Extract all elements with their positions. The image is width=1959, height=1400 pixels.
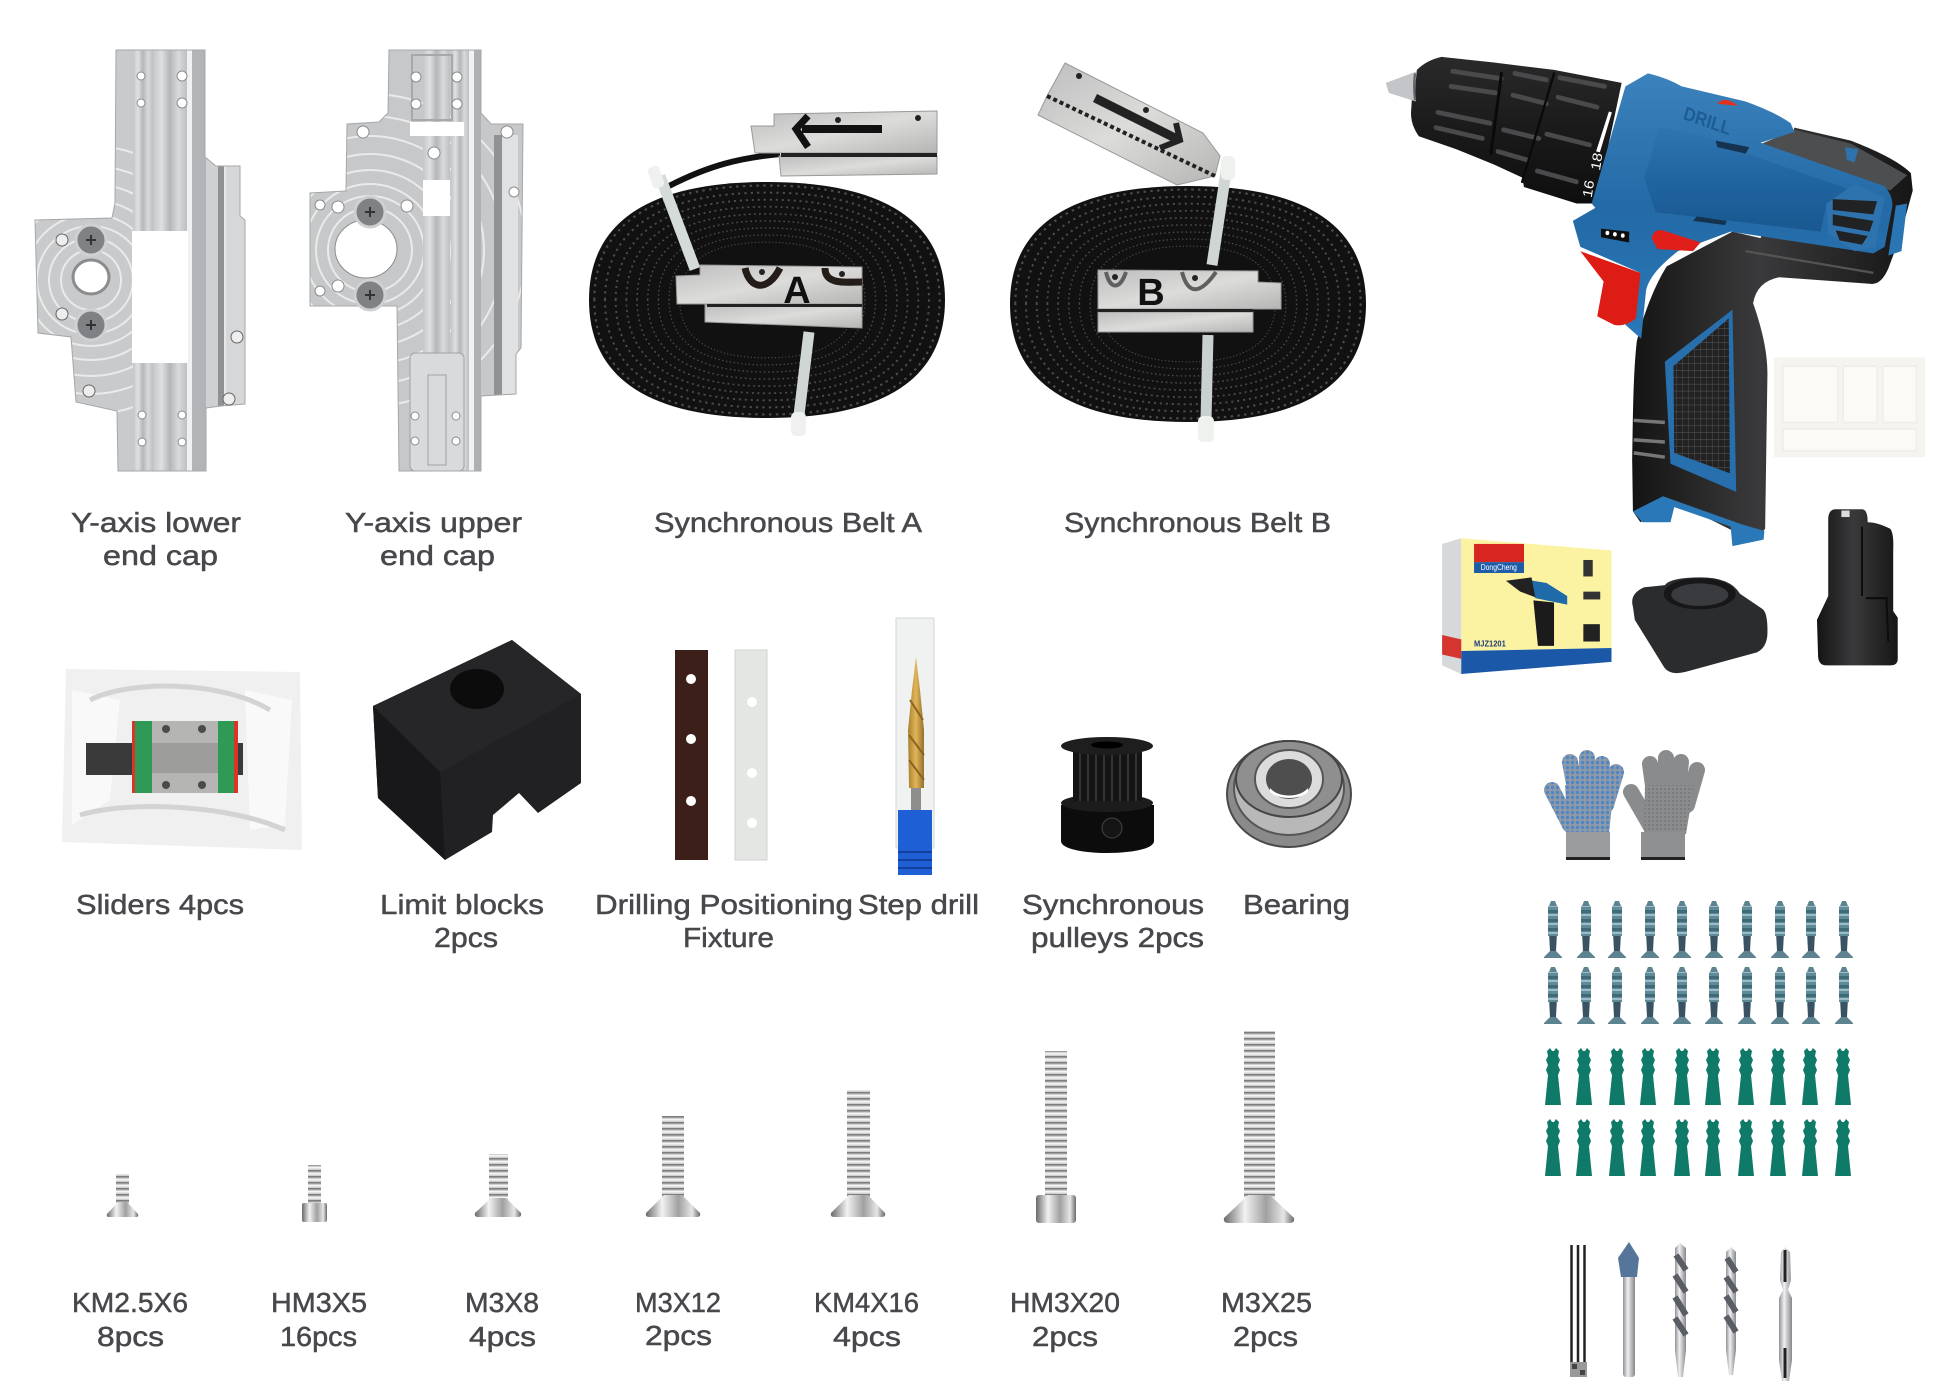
label: 2pcs (434, 922, 498, 953)
item: M3X12 2pcs (635, 1116, 721, 1351)
label: M3X25 (1221, 1287, 1312, 1318)
item: Bearing (1227, 741, 1351, 920)
label: Synchronous Belt A (654, 507, 922, 538)
item: M3X8 4pcs (465, 1154, 539, 1352)
label (271, 1287, 367, 1352)
icon: work gloves (1552, 758, 1697, 860)
label (1221, 1287, 1312, 1352)
image: countersunk screw (1224, 1031, 1294, 1223)
charger (1632, 577, 1767, 673)
label: Y-axis upper (345, 507, 522, 538)
label (1010, 1287, 1120, 1352)
image: coiled belt A with clamps (589, 111, 945, 436)
green wall anchors: two rows of ten (1545, 1048, 1851, 1176)
icon: diamond hole bit (1570, 1245, 1587, 1377)
battery (1817, 509, 1898, 665)
label: M3X8 (465, 1287, 539, 1318)
cordless drill kit (1386, 57, 1925, 674)
image: step drill in tube (896, 618, 934, 875)
image: countersunk screw (646, 1116, 700, 1217)
label: end cap (103, 540, 218, 571)
label (1022, 889, 1204, 953)
image: socket head screw (1036, 1051, 1076, 1223)
image: linear slider in clear bag (62, 669, 302, 850)
label: HM3X5 (271, 1287, 367, 1318)
image: countersunk screw (107, 1174, 138, 1217)
label: 8pcs (97, 1321, 164, 1352)
item: Y-axis upper end cap (310, 50, 524, 572)
clear storage case (1774, 357, 1925, 457)
item: Y-axis lower end cap (34, 50, 246, 572)
image: coiled belt B with clamps (1010, 63, 1366, 442)
box brand text: DongCheng (1481, 562, 1517, 572)
label (635, 1287, 721, 1351)
label: Limit blocks (380, 889, 544, 920)
icon: cordless drill (1386, 57, 1913, 546)
brand text on housing: DRILL (1681, 103, 1733, 139)
label: Y-axis lower (71, 507, 241, 538)
item: Synchronous Belt A (589, 111, 945, 538)
image: countersunk screw (475, 1154, 521, 1217)
item: Drilling Positioning Fixture (595, 650, 853, 953)
label: pulleys 2pcs (1031, 922, 1204, 953)
label: end cap (380, 540, 495, 571)
item: M3X25 2pcs (1221, 1031, 1312, 1352)
label: Drilling Positioning (595, 889, 853, 920)
wood screws: two rows of ten (1544, 901, 1853, 1024)
label: HM3X20 (1010, 1287, 1120, 1318)
torque numbers (1581, 152, 1606, 199)
image: two drilling guide bars (675, 650, 767, 860)
icon: twist bit (1726, 1247, 1736, 1375)
icon: twist bit (1675, 1243, 1686, 1377)
label (345, 507, 522, 571)
label: 16pcs (280, 1321, 357, 1352)
label (814, 1287, 919, 1352)
label: Bearing (1243, 889, 1350, 920)
item: Synchronous pulleys 2pcs (1022, 737, 1204, 953)
label (465, 1287, 539, 1352)
item: Synchronous Belt B (1010, 63, 1366, 538)
letter A: A (783, 270, 811, 312)
label: 2pcs (1233, 1321, 1298, 1352)
label: 4pcs (833, 1321, 901, 1352)
item: Sliders 4pcs (62, 669, 302, 920)
image: timing pulley (1061, 737, 1154, 853)
label (71, 507, 241, 571)
label: Synchronous Belt B (1064, 507, 1331, 538)
label: KM2.5X6 (72, 1287, 188, 1318)
image: socket head screw (302, 1165, 327, 1222)
item: HM3X5 16pcs (271, 1165, 367, 1352)
label: 4pcs (469, 1321, 536, 1352)
drill bit set (1570, 1242, 1792, 1381)
item: HM3X20 2pcs (1010, 1051, 1120, 1352)
label: Synchronous (1022, 889, 1204, 920)
label (380, 889, 544, 953)
label: Fixture (683, 922, 774, 953)
label (72, 1287, 188, 1352)
item: KM4X16 4pcs (814, 1090, 919, 1352)
item: Step drill (858, 618, 979, 920)
image: countersunk screw (831, 1090, 885, 1217)
label (595, 889, 853, 953)
item: KM2.5X6 8pcs (72, 1174, 188, 1352)
torque numbers: 16 (1581, 179, 1598, 199)
letter B: B (1137, 272, 1165, 314)
label: Sliders 4pcs (76, 889, 244, 920)
label: KM4X16 (814, 1287, 919, 1318)
icon: glass bit (1618, 1242, 1639, 1377)
image: flanged ball bearing (1227, 741, 1351, 847)
item: Limit blocks 2pcs (373, 640, 581, 953)
image: upper end cap plate (310, 50, 524, 472)
icon: double-ended screwdriver bit (1779, 1247, 1792, 1381)
torque numbers: 18 (1589, 152, 1606, 172)
image: black 3D-printed limit block (373, 640, 581, 860)
image: lower end cap plate (34, 50, 246, 472)
label: Step drill (858, 889, 979, 920)
retail box (1442, 538, 1612, 674)
label: 2pcs (1032, 1321, 1098, 1352)
box model text: MJZ1201 (1474, 639, 1506, 649)
label: 2pcs (645, 1320, 712, 1351)
label: M3X12 (635, 1287, 721, 1318)
